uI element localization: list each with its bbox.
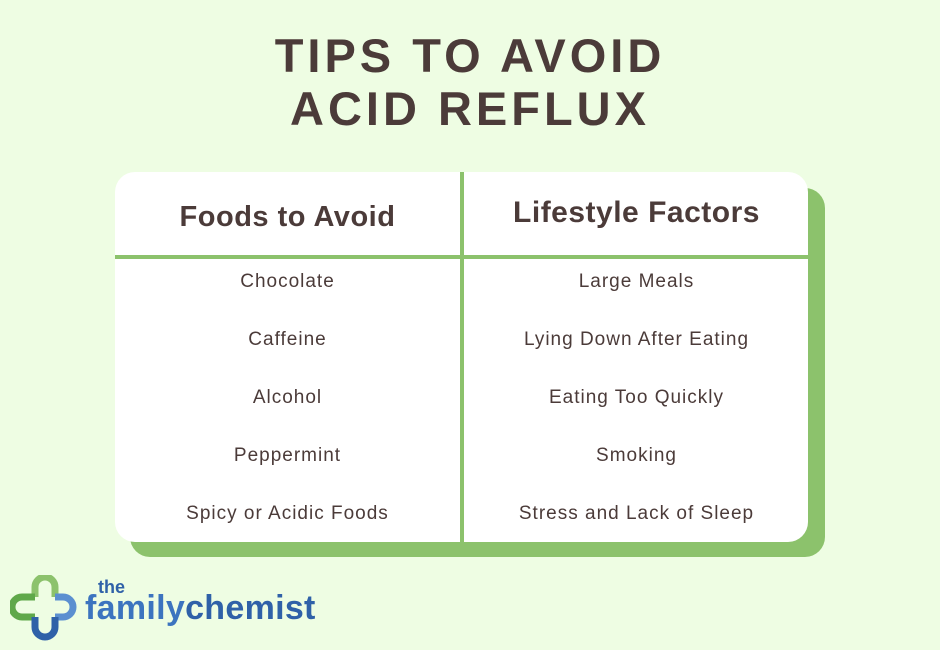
logo: familychemist xyxy=(85,589,316,627)
card shadow xyxy=(130,188,825,557)
column: foods to avoid: Chocolate xyxy=(240,271,335,292)
title: ACID REFLUX xyxy=(290,82,650,135)
icon: cross xyxy=(10,575,76,640)
column: lifestyle factors: Large Meals xyxy=(579,271,694,292)
column: foods to avoid xyxy=(180,201,395,524)
title: TIPS TO AVOID xyxy=(275,29,665,82)
column: lifestyle factors: Eating Too Quickly xyxy=(549,387,724,408)
heading: lifestyle: Lifestyle Factors xyxy=(513,196,760,229)
column: foods to avoid: Caffeine xyxy=(248,329,327,350)
heading: foods: Foods to Avoid xyxy=(180,201,395,233)
logo text: the xyxy=(98,577,125,597)
column: foods to avoid: Spicy or Acidic Foods xyxy=(186,503,389,524)
column: foods to avoid: Alcohol xyxy=(253,387,322,408)
title xyxy=(275,29,665,135)
logo xyxy=(10,575,316,640)
table card xyxy=(115,172,808,542)
column: lifestyle factors: Lying Down After Eating xyxy=(524,329,749,350)
column: lifestyle factors: Stress and Lack of Sleep xyxy=(519,503,754,524)
column: lifestyle factors xyxy=(513,196,760,524)
column: foods to avoid: Peppermint xyxy=(234,445,341,466)
column: lifestyle factors: Smoking xyxy=(596,445,677,466)
